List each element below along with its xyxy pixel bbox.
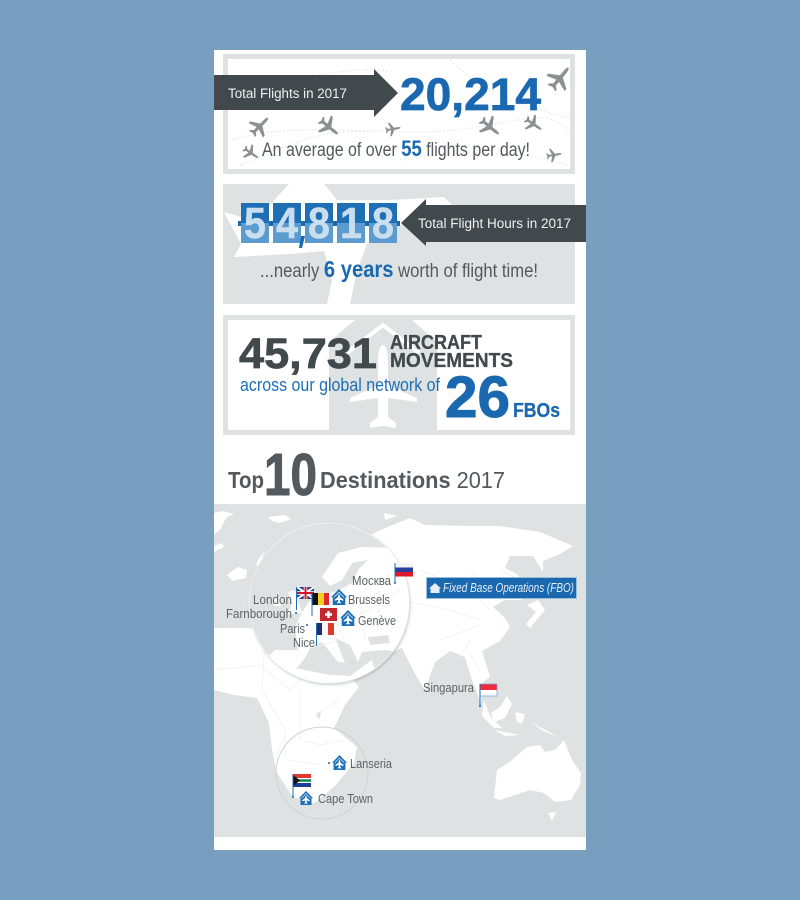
panel: total flights [214, 56, 578, 172]
panel: aircraft movements [226, 318, 572, 432]
flip counter 54,818: 4 [276, 199, 298, 248]
flag: russia, Москва: Москва [352, 573, 392, 588]
flag: belgium, Brussels [312, 589, 390, 616]
flip counter 54,818: 1 [340, 199, 362, 248]
icons: small planes [240, 60, 578, 164]
heading: top 10 destinations: Destinations 2017 [320, 467, 505, 493]
flag: south africa, Cape Town [292, 774, 373, 806]
text: nearly 6 years: ...nearly 6 years worth of flight time! [260, 256, 538, 282]
flip counter 54,818 [238, 199, 400, 248]
flag: united kingdom, London: London [253, 592, 292, 607]
flag: singapore, Singapura: Singapura [423, 680, 475, 695]
text: aircraft movements: MOVEMENTS [390, 350, 513, 372]
plane silhouette [224, 184, 452, 304]
flag: singapore, Singapura [423, 680, 497, 707]
arrow: total flights label: Total Flights in 2017 [228, 86, 347, 101]
number: 26 FBOs: 26 [445, 365, 510, 430]
label: Paris: Paris [280, 621, 305, 636]
inset circle: south africa [276, 727, 368, 819]
flag: belgium, Brussels: Brussels [348, 592, 390, 607]
text: global network: across our global network of [240, 375, 441, 395]
number: 45,731: 45,731 [239, 330, 377, 378]
flip counter 54,818: 8 [372, 199, 394, 248]
heading: top 10 destinations: 10 [264, 442, 317, 508]
flag: france, Nice [293, 623, 334, 650]
heading: top 10 destinations [228, 442, 505, 508]
hangar with plane [329, 320, 437, 430]
text: aircraft movements [390, 332, 513, 372]
text: aircraft movements: AIRCRAFT [390, 332, 482, 354]
flag: russia, Москва [352, 563, 413, 588]
flag: france, Nice: Nice [293, 635, 315, 650]
flag: south africa, Cape Town: Cape Town [318, 791, 373, 806]
flip counter 54,818: 8 [308, 199, 330, 248]
flip counter 54,818: 5 [244, 199, 266, 248]
number: 26 FBOs [445, 365, 560, 430]
flag: united kingdom, London [253, 587, 314, 610]
arrow: total flight hours label [401, 199, 586, 246]
number: 20,214: 20,214 [400, 69, 541, 120]
grey seas and map details [317, 712, 321, 719]
legend: fixed base operations [426, 578, 576, 598]
marker: Lanseria: Lanseria [350, 756, 393, 771]
label: Farnborough: Farnborough [226, 606, 292, 621]
inset circle: europe [249, 523, 415, 690]
legend: fixed base operations: Fixed Base Operations (FBO) [443, 580, 574, 595]
arrow: total flights label [214, 69, 398, 117]
flag: switzerland, Genève [320, 608, 396, 628]
text: average per day: An average of over 55 flights per day! [262, 136, 530, 161]
panel: total flight hours [223, 184, 586, 304]
land masses [214, 511, 581, 821]
marker: Lanseria [328, 755, 393, 771]
heading: top 10 destinations: Top [228, 467, 264, 493]
arrow: total flight hours label: Total Flight Hours in 2017 [418, 216, 571, 231]
flag: switzerland, Genève: Genève [358, 613, 396, 628]
white page card [214, 50, 586, 850]
panel: world map [214, 504, 586, 837]
number: 26 FBOs: FBOs [513, 400, 560, 422]
